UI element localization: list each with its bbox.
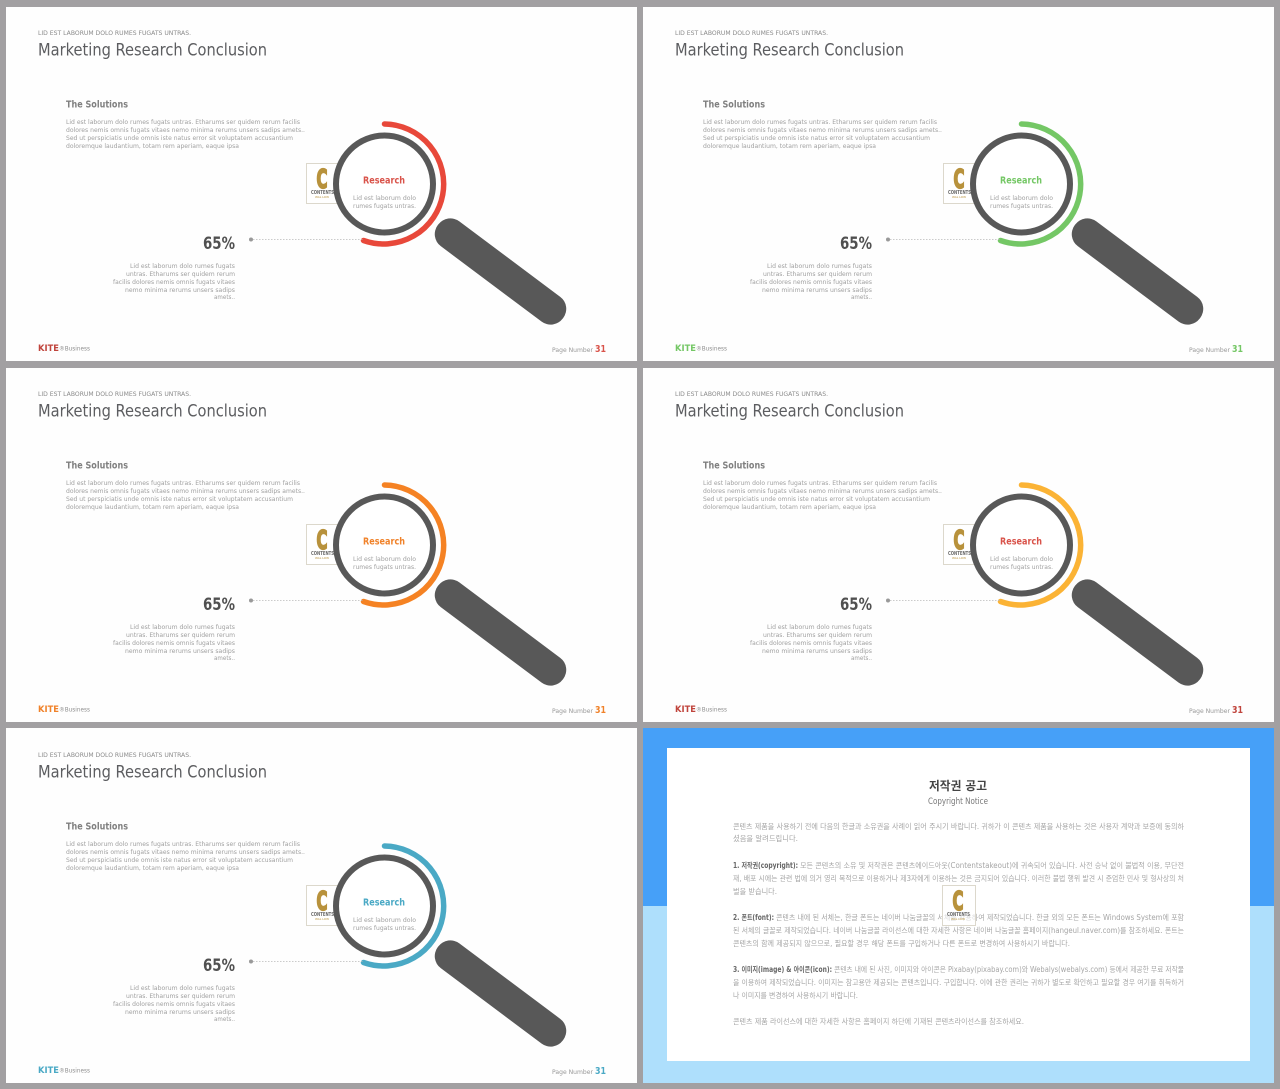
notice section 1: 모든 콘텐츠의 소유 및 저작권은 콘텐츠에이드아웃(Contentstakeout)에 귀속되어 있습니다. 사전 승낙 없이 불법적 이용, 무단전: [800, 860, 1184, 870]
brand: [38, 1066, 91, 1076]
magnifier label: Research: [1000, 176, 1042, 186]
solutions text: dolores nemis omnis fugats vitaes nemo minima rerums unsers sadips amets..: [66, 848, 305, 856]
percentage text: [750, 623, 873, 662]
magnifier: [973, 124, 1209, 331]
magnifier: [336, 846, 572, 1053]
slide title: Marketing Research Conclusion: [38, 402, 267, 422]
solutions text: Sed ut perspiciatis unde omnis iste natus error sit voluptatem accusantium: [66, 856, 293, 864]
slide title: Marketing Research Conclusion: [675, 402, 904, 422]
logo watermark: CONTENTS: [311, 551, 334, 557]
percentage text: [113, 984, 236, 1023]
percentage text: untras. Etharums ser quidem rerum: [126, 631, 235, 639]
brand: [675, 705, 728, 715]
magnifier label: Research: [363, 898, 405, 908]
leader line: [886, 238, 1000, 242]
solutions text: Lid est laborum dolo rumes fugats untras. Etharums ser quidem rerum facilis: [66, 479, 301, 487]
page number: [552, 344, 606, 355]
brand: KITE: [38, 344, 59, 354]
page number: Page Number: [1189, 346, 1230, 354]
leader line: [249, 238, 363, 242]
logo watermark: WAL LOW: [315, 195, 329, 199]
slide eyebrow: LID EST LABORUM DOLO RUMES FUGATS UNTRAS.: [675, 29, 828, 37]
percentage text: Lid est laborum dolo rumes fugats: [130, 623, 236, 631]
brand: ®Business: [59, 344, 91, 352]
notice section 3: 을 이용하여 제작되었습니다. 이미지는 참고용만 제공되는 콘텐츠입니다. 구입합니다. 이에 관한 권리는 귀하가 별도로 확인하고 필요할 경우 여기를 취득하거: [733, 977, 1184, 987]
page number: Page Number: [552, 1068, 593, 1076]
notice section 1: 벌을 받습니다.: [733, 886, 777, 896]
percentage text: facilis dolores nemis omnis fugats vitaes: [113, 1000, 236, 1008]
solutions heading: The Solutions: [703, 460, 765, 472]
solutions text: Lid est laborum dolo rumes fugats untras. Etharums ser quidem rerum facilis: [66, 840, 301, 848]
solutions text: dolores nemis omnis fugats vitaes nemo minima rerums unsers sadips amets..: [66, 487, 305, 495]
notice title: 저작권 공고: [929, 778, 987, 793]
percentage text: nemo minima rerums unsers sadips: [125, 647, 236, 655]
percentage text: Lid est laborum dolo rumes fugats: [767, 623, 873, 631]
logo watermark: WAL LOW: [952, 195, 966, 199]
brand: [675, 344, 728, 354]
brand: [38, 705, 91, 715]
notice section 2: [733, 912, 1184, 948]
magnifier text: Lid est laborum dolo: [353, 916, 416, 924]
solutions text: dolores nemis omnis fugats vitaes nemo minima rerums unsers sadips amets..: [703, 487, 942, 495]
magnifier text: [990, 194, 1053, 210]
solutions text: [66, 479, 305, 511]
magnifier text: rumes fugats untras.: [353, 924, 416, 932]
notice section 3: 나 이미지를 변경하여 사용하시기 바랍니다.: [733, 990, 858, 1000]
slide title: Marketing Research Conclusion: [38, 762, 267, 782]
percentage text: nemo minima rerums unsers sadips: [762, 286, 873, 294]
percentage text: [750, 262, 873, 301]
percentage: 65%: [203, 956, 235, 975]
leader line: [886, 598, 1000, 602]
logo watermark: [942, 886, 976, 926]
magnifier text: Lid est laborum dolo: [990, 194, 1053, 202]
page number: 31: [1232, 705, 1243, 716]
page number: [1189, 705, 1243, 716]
slide eyebrow: LID EST LABORUM DOLO RUMES FUGATS UNTRAS.: [38, 390, 191, 398]
logo watermark: C: [316, 165, 328, 195]
percentage text: [113, 623, 236, 662]
slide title: Marketing Research Conclusion: [675, 40, 904, 60]
solutions heading: The Solutions: [66, 822, 128, 832]
percentage text: nemo minima rerums unsers sadips: [125, 1008, 236, 1016]
logo watermark: C: [316, 526, 328, 556]
percentage text: amets..: [851, 293, 872, 301]
logo watermark: [306, 524, 342, 564]
solutions text: dolores nemis omnis fugats vitaes nemo minima rerums unsers sadips amets..: [703, 126, 942, 134]
notice section 2: 2. 폰트(font):: [733, 913, 774, 922]
percentage text: Lid est laborum dolo rumes fugats: [130, 984, 236, 992]
percentage text: Lid est laborum dolo rumes fugats: [767, 262, 873, 270]
panel: teal slide: [6, 728, 637, 1083]
percentage text: amets..: [214, 293, 235, 301]
percentage text: untras. Etharums ser quidem rerum: [126, 270, 235, 278]
magnifier text: Lid est laborum dolo: [353, 194, 416, 202]
panel: yellow slide: [643, 368, 1274, 722]
solutions text: [66, 840, 305, 872]
page number: [552, 705, 606, 716]
page number: Page Number: [552, 346, 593, 354]
percentage text: amets..: [214, 654, 235, 662]
solutions text: dolores nemis omnis fugats vitaes nemo minima rerums unsers sadips amets..: [66, 126, 305, 134]
notice section 3: [733, 964, 1184, 1000]
page number: [1189, 344, 1243, 355]
notice section 3: 콘텐츠 내에 된 사진, 이미지와 아이콘은 Pixabay(pixabay.com)와 Webalys(webalys.com) 등에서 제공한 무료 저작물: [834, 964, 1184, 974]
page number: Page Number: [1189, 707, 1230, 715]
percentage text: nemo minima rerums unsers sadips: [762, 647, 873, 655]
brand: KITE: [675, 344, 696, 354]
magnifier text: rumes fugats untras.: [353, 202, 416, 210]
logo watermark: C: [954, 165, 964, 195]
solutions text: Lid est laborum dolo rumes fugats untras. Etharums ser quidem rerum facilis: [66, 118, 301, 126]
solutions text: [703, 479, 942, 511]
solutions text: doloremque laudantium, totam rem aperiam, eaque ipsa: [66, 503, 239, 511]
magnifier text: rumes fugats untras.: [990, 563, 1053, 571]
logo watermark: CONTENTS: [311, 912, 334, 918]
percentage: 65%: [840, 234, 872, 253]
magnifier: [973, 485, 1209, 692]
magnifier text: [353, 916, 416, 932]
percentage text: [113, 262, 236, 301]
logo watermark: [944, 524, 980, 564]
percentage: 65%: [203, 595, 235, 614]
panel: red slide: [6, 7, 637, 361]
percentage text: untras. Etharums ser quidem rerum: [763, 270, 872, 278]
logo watermark: WAL LOW: [315, 917, 329, 921]
magnifier label: Research: [1000, 536, 1042, 548]
magnifier text: rumes fugats untras.: [990, 202, 1053, 210]
brand: [38, 344, 91, 354]
notice footer: 콘텐츠 제품 라이선스에 대한 자세한 사항은 홈페이지 하단에 기재된 콘텐츠라이선스를 참조하세요.: [733, 1016, 1024, 1026]
magnifier text: Lid est laborum dolo: [990, 555, 1053, 563]
solutions heading: The Solutions: [703, 100, 765, 110]
logo watermark: CONTENTS: [948, 190, 971, 196]
percentage text: untras. Etharums ser quidem rerum: [126, 992, 235, 1000]
brand: ®Business: [696, 344, 728, 352]
brand: KITE: [38, 1066, 59, 1076]
notice intro: 콘텐츠 제품을 사용하기 전에 다음의 한글과 소유권을 사례이 읽어 주시기 바랍니다. 귀하가 이 콘텐츠 제품을 사용하는 것은 사용자 계약과 보증에 동의하: [733, 821, 1184, 831]
percentage text: facilis dolores nemis omnis fugats vitaes: [113, 639, 236, 647]
percentage text: untras. Etharums ser quidem rerum: [763, 631, 872, 639]
magnifier label: Research: [363, 176, 405, 186]
slide title: Marketing Research Conclusion: [38, 40, 267, 60]
magnifier text: rumes fugats untras.: [353, 563, 416, 571]
panel: orange slide: [6, 368, 637, 722]
percentage: 65%: [203, 234, 235, 253]
logo watermark: [306, 886, 342, 926]
solutions text: Lid est laborum dolo rumes fugats untras. Etharums ser quidem rerum facilis: [703, 479, 938, 487]
logo watermark: WAL LOW: [315, 556, 329, 560]
slide eyebrow: LID EST LABORUM DOLO RUMES FUGATS UNTRAS.: [38, 29, 191, 37]
solutions text: Sed ut perspiciatis unde omnis iste natus error sit voluptatem accusantium: [66, 495, 293, 503]
logo watermark: CONTENTS: [948, 551, 971, 557]
leader line: [249, 960, 363, 964]
page number: [552, 1066, 606, 1077]
slide eyebrow: LID EST LABORUM DOLO RUMES FUGATS UNTRAS.: [675, 390, 828, 398]
page number: 31: [1232, 344, 1243, 355]
logo watermark: CONTENTS: [947, 912, 970, 918]
solutions text: Sed ut perspiciatis unde omnis iste natus error sit voluptatem accusantium: [66, 134, 293, 142]
leader line: [249, 598, 363, 602]
solutions text: doloremque laudantium, totam rem aperiam, eaque ipsa: [66, 864, 239, 872]
logo watermark: WAL LOW: [951, 917, 965, 921]
magnifier label: Research: [363, 536, 405, 548]
notice section 1: 1. 저작권(copyright):: [733, 860, 798, 870]
solutions text: doloremque laudantium, totam rem aperiam, eaque ipsa: [703, 503, 876, 511]
logo watermark: C: [316, 887, 328, 917]
logo watermark: [306, 164, 342, 204]
solutions text: [703, 118, 942, 150]
percentage text: facilis dolores nemis omnis fugats vitaes: [750, 278, 873, 286]
percentage text: amets..: [214, 1015, 235, 1023]
logo watermark: C: [952, 887, 964, 917]
logo watermark: WAL LOW: [952, 556, 966, 560]
brand: ®Business: [59, 1066, 91, 1074]
notice subtitle: Copyright Notice: [928, 797, 988, 807]
solutions text: doloremque laudantium, totam rem aperiam, eaque ipsa: [66, 142, 239, 150]
solutions text: [66, 118, 305, 150]
logo watermark: CONTENTS: [311, 190, 334, 196]
page number: 31: [595, 1066, 606, 1077]
magnifier: [336, 485, 572, 692]
notice section 2: 콘텐츠 내에 된 서체는, 한글 폰트는 네이버 나눔글꼴의 서체를 사용하여 제작되었습니다. 한글 외의 모든 폰트는 Windows System에 포함: [776, 912, 1184, 922]
percentage text: amets..: [851, 654, 872, 662]
notice intro: [733, 821, 1184, 843]
slide eyebrow: LID EST LABORUM DOLO RUMES FUGATS UNTRAS.: [38, 751, 191, 759]
percentage: 65%: [840, 595, 872, 614]
brand: KITE: [675, 705, 696, 715]
brand: KITE: [38, 705, 59, 715]
solutions text: Sed ut perspiciatis unde omnis iste natus error sit voluptatem accusantium: [703, 134, 930, 142]
notice section 1: [733, 860, 1184, 896]
brand: ®Business: [696, 706, 728, 714]
panel: copyright notice: [643, 728, 1274, 1083]
magnifier text: [353, 555, 416, 571]
brand: ®Business: [59, 706, 91, 714]
percentage text: nemo minima rerums unsers sadips: [125, 286, 236, 294]
notice intro: 셨음을 알려드립니다.: [733, 833, 798, 843]
solutions text: Lid est laborum dolo rumes fugats untras. Etharums ser quidem rerum facilis: [703, 118, 938, 126]
notice section 3: 3. 이미지(image) & 아이콘(icon):: [733, 964, 832, 974]
magnifier text: [990, 555, 1053, 571]
logo watermark: [944, 164, 980, 204]
magnifier text: [353, 194, 416, 210]
page number: 31: [595, 344, 606, 355]
percentage text: facilis dolores nemis omnis fugats vitaes: [113, 278, 236, 286]
panel: green slide: [643, 7, 1274, 361]
magnifier: [336, 124, 572, 331]
logo watermark: C: [954, 526, 964, 556]
solutions heading: The Solutions: [66, 100, 128, 110]
solutions text: Sed ut perspiciatis unde omnis iste natus error sit voluptatem accusantium: [703, 495, 930, 503]
solutions text: doloremque laudantium, totam rem aperiam, eaque ipsa: [703, 142, 876, 150]
page number: Page Number: [552, 707, 593, 715]
percentage text: facilis dolores nemis omnis fugats vitaes: [750, 639, 873, 647]
page number: 31: [595, 705, 606, 716]
magnifier text: Lid est laborum dolo: [353, 555, 416, 563]
percentage text: Lid est laborum dolo rumes fugats: [130, 262, 236, 270]
notice section 2: 된 서체의 글꼴로 제작되었습니다. 네이버 나눔글꼴 라이선스에 대한 자세한 사항은 네이버 나눔글꼴 홈페이지(hangeul.naver.com)를 참조하세요. 폰트는: [733, 925, 1184, 935]
notice section 1: 재, 배포 시에는 관련 법에 의거 영리 목적으로 이용하거나 제3자에게 이용하는 것은 금지되어 있습니다. 이러한 불법 행위 발견 시 준엄한 민사 및 형사상의 처: [733, 873, 1184, 883]
solutions heading: The Solutions: [66, 460, 128, 472]
notice section 2: 콘텐츠의 함께 제공되지 않으므로, 필요할 경우 해당 폰트를 구입하거나 다른 폰트로 변경하여 사용하시기 바랍니다.: [733, 938, 1070, 948]
